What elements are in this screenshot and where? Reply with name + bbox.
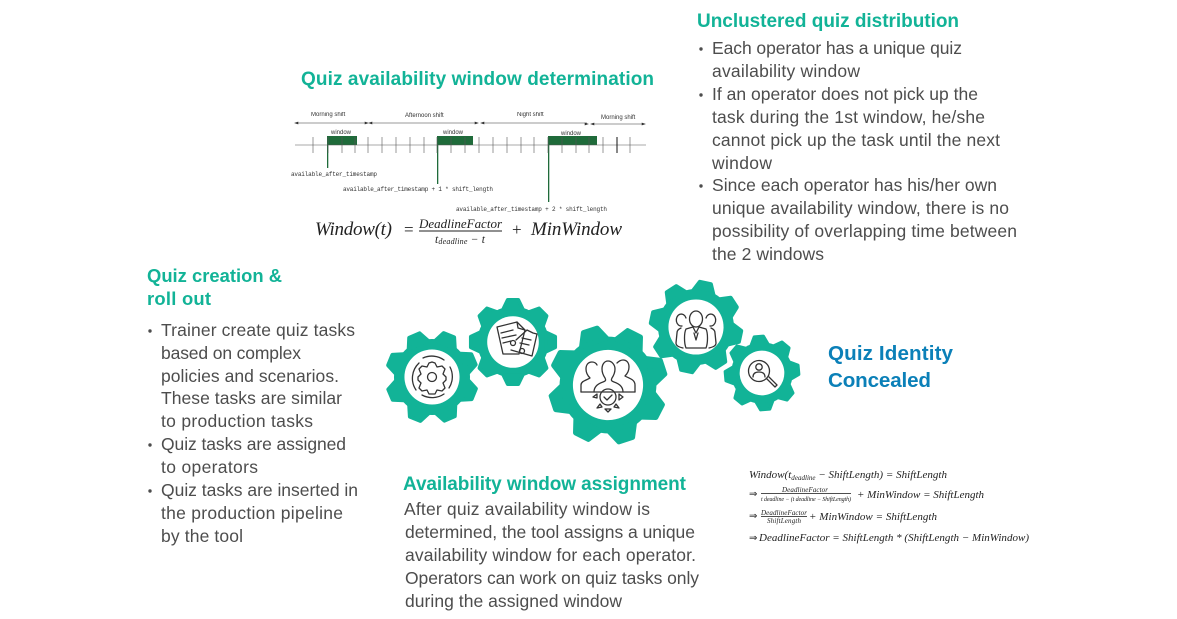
list: quiz creation and roll out: the production pipeline [161, 503, 343, 523]
list: unclustered quiz distribution [699, 38, 1017, 264]
text block: availability window assignment: determined, the tool assigns a unique [405, 522, 695, 542]
list: unclustered quiz distribution: task during the 1st window, he/she [712, 107, 985, 127]
availability windows [327, 136, 597, 202]
shift labels: Afternoon shift [405, 113, 444, 119]
list: quiz creation and roll out: by the tool [161, 526, 243, 546]
list: quiz creation and roll out: to operators [161, 457, 258, 477]
time axis and ticks [295, 137, 646, 153]
gear: search person [722, 333, 802, 413]
window formula: Window(t) [315, 219, 392, 240]
heading: quiz creation and roll out: roll out [147, 288, 211, 309]
gear: team [642, 273, 750, 381]
derivation formulas: + MinWindow = ShiftLength [857, 489, 984, 501]
gear: documents [471, 300, 555, 384]
shift labels: Night shift [517, 112, 544, 118]
window labels: window [442, 130, 464, 136]
heading: quiz availability window determination: Quiz availability window determination [301, 69, 654, 90]
window formula: t [435, 234, 438, 246]
list: quiz creation and roll out: based on complex [161, 343, 301, 363]
window formula: − t [468, 234, 486, 246]
window formula: + [512, 220, 522, 239]
shift arrows [295, 122, 645, 125]
list: quiz creation and roll out: Quiz tasks are inserted in [161, 480, 358, 500]
label: quiz identity concealed: Concealed [828, 369, 931, 392]
list: quiz creation and roll out [148, 320, 358, 546]
window formula: DeadlineFactor [418, 216, 503, 231]
window labels: window [560, 131, 582, 137]
list: unclustered quiz distribution: window [711, 153, 772, 173]
derivation formulas: Window(t [749, 469, 791, 481]
icon: team with check badge [581, 360, 635, 412]
derivation formulas: DeadlineFactor [760, 509, 807, 517]
icon: documents [497, 322, 537, 356]
list: quiz creation and roll out: policies and scenarios. [161, 366, 339, 386]
list: unclustered quiz distribution: the 2 windows [712, 244, 824, 264]
icon: rotating cog [412, 356, 452, 398]
derivation formulas: DeadlineFactor = ShiftLength * (ShiftLength − MinWindow) [758, 532, 1029, 544]
icon: three people [676, 311, 716, 348]
list: unclustered quiz distribution: possibility of overlapping time between [712, 221, 1017, 241]
window formula: MinWindow [530, 219, 622, 240]
text block: availability window assignment: After quiz availability window is [404, 499, 650, 519]
list: quiz creation and roll out: These tasks are similar [161, 388, 342, 408]
icon: magnifier with person [748, 360, 777, 387]
derivation formulas: ShiftLength [767, 517, 802, 525]
derivation formulas: deadline [791, 474, 816, 482]
derivation formulas: ⇒ [749, 533, 757, 544]
text block: availability window assignment: Operators can work on quiz tasks only [405, 568, 699, 588]
shift labels: Morning shift [311, 112, 346, 118]
window formula: deadline [438, 237, 468, 246]
list: unclustered quiz distribution: availability window [712, 61, 860, 81]
timeline diagram [291, 112, 646, 213]
list: quiz creation and roll out: Trainer create quiz tasks [161, 320, 355, 340]
derivation formulas: ⇒ [749, 489, 757, 500]
shift labels [311, 112, 636, 121]
window labels [330, 130, 582, 137]
text block: availability window assignment: availability window for each operator. [405, 545, 696, 565]
text block: availability window assignment [404, 499, 699, 611]
label: quiz identity concealed: Quiz Identity [828, 342, 954, 365]
window labels: window [330, 130, 352, 136]
timestamp labels: available_after_timestamp [291, 171, 377, 178]
heading: availability window assignment: Availability window assignment [403, 474, 687, 495]
window formula [315, 216, 622, 246]
shift labels: Morning shift [601, 115, 636, 121]
heading: unclustered quiz distribution: Unclustered quiz distribution [697, 11, 959, 32]
gear: availability window assignment [531, 308, 685, 462]
list: unclustered quiz distribution: If an operator does not pick up the [712, 84, 978, 104]
list: unclustered quiz distribution: cannot pick up the task until the next [712, 130, 1000, 150]
timestamp labels: available_after_timestamp + 2 * shift_length [456, 206, 607, 213]
heading: quiz creation and roll out: Quiz creation & [147, 265, 282, 286]
derivation formulas: ⇒ [749, 511, 757, 522]
window formula: = [404, 220, 414, 239]
text block: availability window assignment: during the assigned window [405, 591, 622, 611]
list: unclustered quiz distribution: unique availability window, there is no [712, 198, 1009, 218]
timestamp labels [291, 171, 607, 213]
derivation formulas: DeadlineFactor [781, 486, 828, 494]
heading: quiz creation and roll out [147, 265, 282, 309]
derivation formulas: − ShiftLength) = ShiftLength [816, 469, 948, 481]
label: quiz identity concealed [828, 342, 954, 392]
list: quiz creation and roll out: Quiz tasks are assigned [161, 434, 346, 454]
gear: quiz creation [373, 318, 491, 436]
list: quiz creation and roll out: to production tasks [161, 411, 313, 431]
timestamp labels: available_after_timestamp + 1 * shift_length [343, 186, 493, 193]
list: unclustered quiz distribution: Since each operator has his/her own [712, 175, 997, 195]
derivation formulas [749, 469, 1029, 544]
derivation formulas: + MinWindow = ShiftLength [809, 511, 938, 523]
derivation formulas: t deadline − (t deadline − ShiftLength) [761, 496, 851, 503]
list: unclustered quiz distribution: Each operator has a unique quiz [712, 38, 962, 58]
